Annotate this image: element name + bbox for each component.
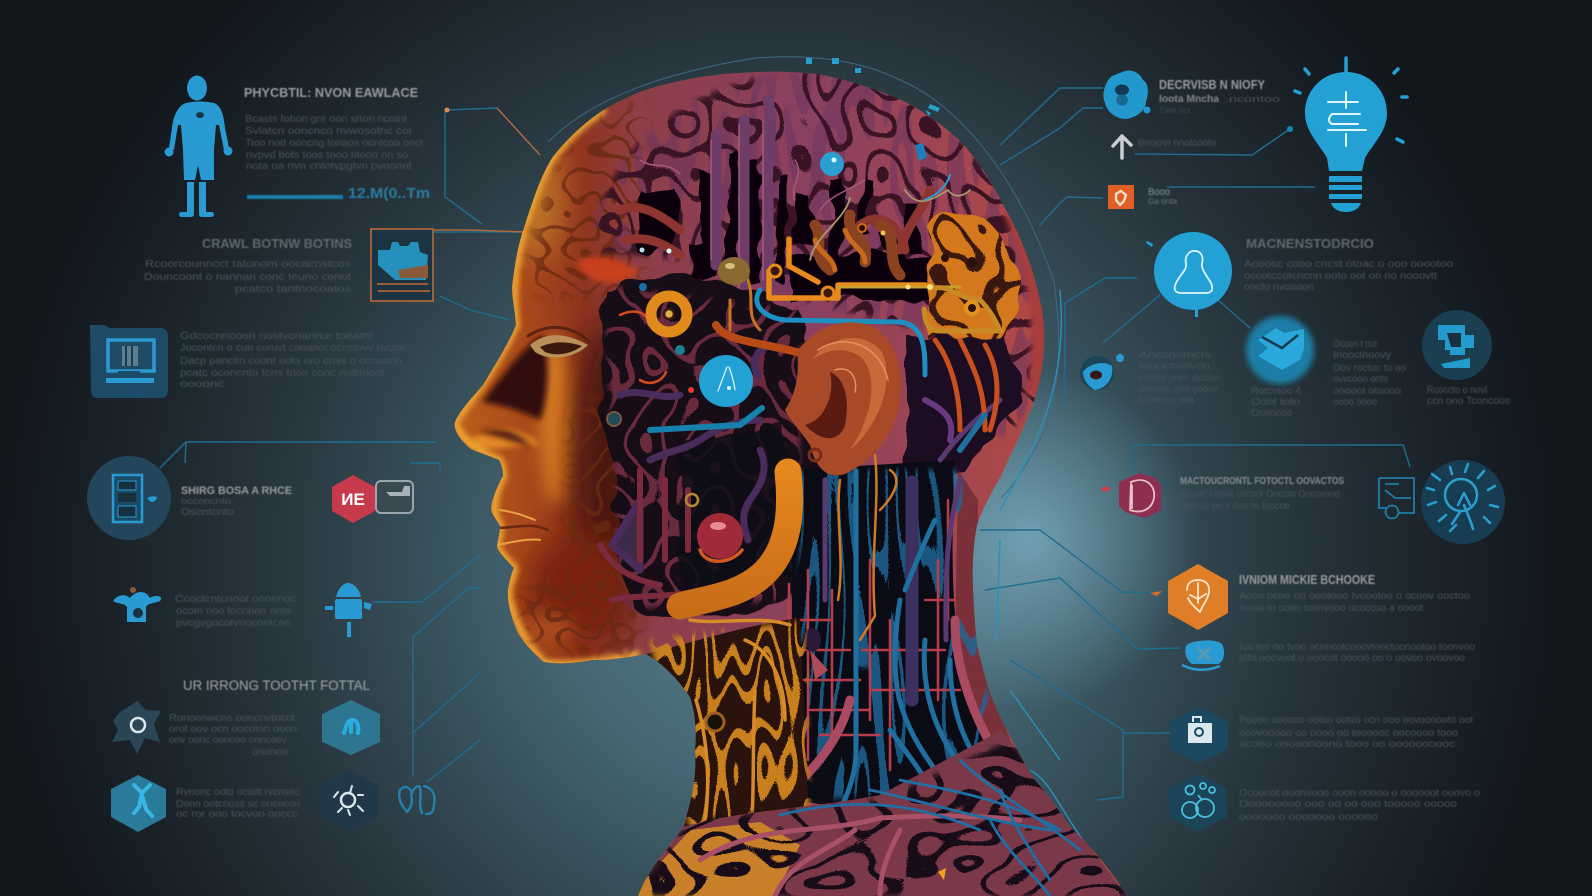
icon: white arrow xyxy=(1113,136,1131,158)
text block: dark monitor xyxy=(1427,384,1510,407)
text block: chest: ocotn noo tocnnon onto xyxy=(176,605,291,617)
text block: chest xyxy=(175,593,296,629)
text block: second left xyxy=(144,237,352,295)
text block: shield xyxy=(1178,475,1344,512)
left column xyxy=(87,76,435,832)
text: arrow label: Boocnn nnotcootn xyxy=(1138,137,1216,149)
orange lower brain xyxy=(926,212,1021,340)
dark zone behind ear xyxy=(905,335,1020,472)
text block: glowing block xyxy=(1251,338,1406,419)
text block: document: SHIRG BOSA A RHCE xyxy=(181,485,292,497)
red ball xyxy=(697,513,743,561)
icon: dark monitor circle xyxy=(1422,310,1492,380)
text block: star: onv oonc ooncoo onncoov xyxy=(169,734,288,746)
text block: second left: CRAWL BOTNW BOTINS xyxy=(202,237,352,251)
text block: chest: pvcgvgocotvnocontcon xyxy=(176,617,291,629)
text block: second left: pcatco tantnocoatos xyxy=(235,283,351,295)
text block: person: Aooosc cooo cncst otoac o ooo ooootoo xyxy=(1244,258,1453,270)
icon: spiky brain circle xyxy=(1421,460,1505,544)
blue small node xyxy=(915,143,927,161)
text block: star: ononoo xyxy=(252,746,288,758)
text block: second left: Douncoont o nannan conc teuno conot xyxy=(144,271,351,283)
text block: top right xyxy=(1159,78,1280,115)
icon: crimson shield xyxy=(1102,473,1161,518)
text block: second left: Rcoorcounncct tatonom oocacnstcos xyxy=(145,258,351,270)
icon: blue person circle xyxy=(1146,232,1232,317)
brain folds xyxy=(592,72,1040,440)
text block: orange hexagon: IVNIOM MICKIE BCHOOKE xyxy=(1239,573,1375,587)
text block: top left: Tioo nott ooncng tonaos ocntcoo onct xyxy=(245,137,423,149)
blue face node xyxy=(699,355,753,407)
orange tube xyxy=(680,472,790,606)
neck front xyxy=(646,616,814,827)
text block: glowing block: Inooctnoovy xyxy=(1333,349,1392,361)
icon: teal hexagon xyxy=(322,700,380,755)
text block: clipboard: ocooo ooooonoono tooo oo oooooooooc xyxy=(1239,738,1455,750)
connector lines xyxy=(160,57,1410,850)
text block: monitor: Dacp pancitn coont oota oro onvs o ocnoonn xyxy=(180,355,402,367)
text block: top right: DECRVISB N NIOFY xyxy=(1159,78,1266,92)
text block: shield: Ocontc I oovc cncoor Oocoto Oocovooo xyxy=(1178,488,1340,500)
text block: orange hexagon: Acon ocno oo oootooo tvcootoo o ocoov ooctoo xyxy=(1239,590,1470,602)
red wire grid xyxy=(780,500,960,770)
text block: blue hexagon: Donn ootcnoss sc oncncon xyxy=(176,798,300,810)
text block: helmet: Ootoco oot xyxy=(1139,394,1194,406)
text block: star xyxy=(169,712,297,758)
neck wires xyxy=(796,466,991,802)
icon: blue chest xyxy=(113,587,161,622)
text block: orange hexagon: Ioooo to oooo toonvooo ococcoo a oooot xyxy=(1239,602,1423,614)
gold ball xyxy=(718,257,750,285)
text block: top left: PHYCBTIL: NVON EAWLACE xyxy=(244,86,418,100)
text block: visor: Ioto oocvoot o ooocot ooooo oo o oovoo ovoovoo xyxy=(1239,652,1465,664)
icon: document circle xyxy=(87,456,171,540)
text block: person: occotccotcncnn ooto oot on no nooovtt xyxy=(1244,270,1437,282)
text block: document xyxy=(181,485,292,518)
text block: dark monitor: ccn ono Tconcoos xyxy=(1427,395,1510,407)
brain region xyxy=(580,60,1060,472)
text block: helmet: cnooo ooro ocoon xyxy=(1139,372,1219,384)
text: orange square label xyxy=(1148,187,1177,206)
text block: network: Ooooooooo ooo oo oo ooo tooooo ooooo xyxy=(1239,798,1457,810)
text block: top left: 12.M(0..Tm xyxy=(348,185,430,202)
icon: network hexagon xyxy=(1169,774,1227,832)
purple bars xyxy=(716,100,771,300)
text block: clipboard: Poooo ooocoo ootoo ootvo ocn ooo oovoonooto oot xyxy=(1239,714,1473,726)
ear xyxy=(785,322,901,475)
icon: outline organ xyxy=(399,786,435,814)
right column xyxy=(1080,58,1510,832)
text block: star: orot oov ocn oocoton ooon xyxy=(169,723,297,735)
text block: top right: .ncontoo xyxy=(1225,94,1280,105)
text block: blue hexagon: Rvnonc ooto ociott rvcnsnc xyxy=(176,786,300,798)
heading: lower left: UR IRRONG TOOTHT FOTTAL xyxy=(183,678,370,693)
text block: top left xyxy=(244,86,430,202)
text block: person: oocto nvonoon xyxy=(1244,281,1314,293)
text block: visor xyxy=(1239,641,1475,664)
text block: orange hexagon xyxy=(1239,573,1470,614)
text block: shield: MACTOUCRONTL FOTOCTL OOVACTOS xyxy=(1180,475,1344,487)
circuitry dark jaw region xyxy=(597,248,821,618)
text block: top left: Svlatcn ooncnco nvwosotnc cot xyxy=(245,125,412,137)
icon: glowing block xyxy=(1246,316,1314,384)
icon: blue robot xyxy=(325,583,372,637)
text: orange square label: Booo xyxy=(1148,187,1170,198)
shoulder folds xyxy=(630,730,1130,896)
text block: helmet: Inooccnovon xyxy=(1139,360,1210,372)
icon: orange framed box xyxy=(371,229,433,301)
icon: orange hexagon xyxy=(1150,564,1228,630)
text block: top left: nvpvd bots toos tnoo titoon on so xyxy=(246,149,408,161)
head base xyxy=(440,60,1140,896)
text block: monitor: oooonc xyxy=(180,378,224,390)
icon: blue blob xyxy=(1103,70,1150,119)
icon: blue hexagon xyxy=(111,775,166,832)
icon: lightbulb xyxy=(1295,58,1407,212)
icon: dark hexagon xyxy=(320,771,379,831)
text block: person: MACNENSTODRCIO xyxy=(1246,237,1374,251)
icon: grey panel xyxy=(376,481,413,513)
text block: star: Ronoonwcns ooncnvtncnt xyxy=(169,712,295,724)
forehead texture xyxy=(522,100,648,302)
text block: document: Oscntcnto xyxy=(181,506,234,518)
text block: glowing block: oooo oooo xyxy=(1333,396,1377,408)
text block: helmet: ouncnc ons goosv xyxy=(1139,383,1219,395)
text block: glowing block: ovvcoon onts xyxy=(1333,373,1388,385)
icon: red hexagon: ИE xyxy=(341,490,365,509)
text block: chest: Ccoctcntcnoot ooncnoc xyxy=(175,593,296,605)
text block: top left: Bcasts fohon gnr oon srton ncntnt xyxy=(245,113,407,125)
icon: red hexagon xyxy=(332,475,375,523)
orange ring xyxy=(651,296,687,332)
icon: monitor tile xyxy=(90,325,168,398)
text block: glowing block: Rotcotoo 4 xyxy=(1251,385,1301,397)
text: orange square label: Ga onta xyxy=(1148,196,1177,206)
text block: monitor: Gdcocnncoon nostvcnanrce toeatnt xyxy=(180,330,373,342)
icon: orange square xyxy=(1108,185,1134,209)
text block: monitor: pcatc oconcnto tcns tnos conc notrnicot xyxy=(180,367,384,379)
text block: network: Ocoonot ooonvooo ooon ooooo o oooooot ooovo o xyxy=(1239,787,1480,799)
red lower brain xyxy=(620,190,930,255)
icon: blue helmet xyxy=(1080,354,1124,390)
text block: monitor: Jocontcn o cun coruvt cnoanot ocnstnvv nvcos xyxy=(180,342,405,354)
icon: dark star xyxy=(112,701,161,754)
text block: blue hexagon: oc ror ooo tocvoo ooccc xyxy=(176,808,298,820)
icon: human figure xyxy=(164,76,232,217)
text block: dark monitor: Rcoccto o novl xyxy=(1427,384,1487,396)
text block: glowing block: Ocnocoo xyxy=(1251,407,1292,419)
neck dark region xyxy=(778,398,1010,804)
text block: glowing block: Ocoon t oot xyxy=(1333,338,1377,350)
text block: top left: nota oa nvn cntotvpgtvn pvoonnt xyxy=(246,160,412,172)
text block: visor: Ioo too oo tvoo ocnncotcoocvtooctoonootoo toonvoo xyxy=(1239,641,1475,653)
text block: glowing block: Ooot toto xyxy=(1251,396,1300,408)
text block: shield: Ccoosc oo ti ooo to Ioocoo xyxy=(1178,500,1290,512)
cheek texture xyxy=(516,398,646,660)
text block: network: ooooooo ooooooo oooooo xyxy=(1239,811,1378,823)
text block: helmet: Aoccnotncts xyxy=(1139,349,1211,361)
text block: network xyxy=(1239,787,1480,823)
text block: monitor xyxy=(180,330,405,390)
dark slots xyxy=(640,150,930,300)
icon: clipboard hexagon xyxy=(1170,707,1228,763)
head illustration xyxy=(440,60,1140,896)
text block: glowing block: Dov roctoc to oo xyxy=(1333,362,1406,374)
blue brain node xyxy=(820,152,844,176)
text block: document: occoncnto xyxy=(181,496,231,506)
text block: blue hexagon xyxy=(176,786,300,820)
face shading xyxy=(455,109,642,664)
text block: person xyxy=(1244,237,1453,293)
orange circuit and brain blobs xyxy=(716,175,1001,450)
icon: document outline xyxy=(1379,478,1414,518)
text block: glowing block: ooooot otnoon xyxy=(1333,385,1401,397)
text block: clipboard xyxy=(1239,714,1473,750)
text block: clipboard: ooovooooo oo oooo oo toooooc oocoooo tooo xyxy=(1239,727,1458,739)
text block: helmet xyxy=(1139,349,1219,406)
text block: top right: Doo oct xyxy=(1160,106,1191,115)
icon: blue visor xyxy=(1182,640,1224,670)
shoulders xyxy=(630,730,1130,896)
text block: top right: Ioota Mncha xyxy=(1159,93,1219,105)
